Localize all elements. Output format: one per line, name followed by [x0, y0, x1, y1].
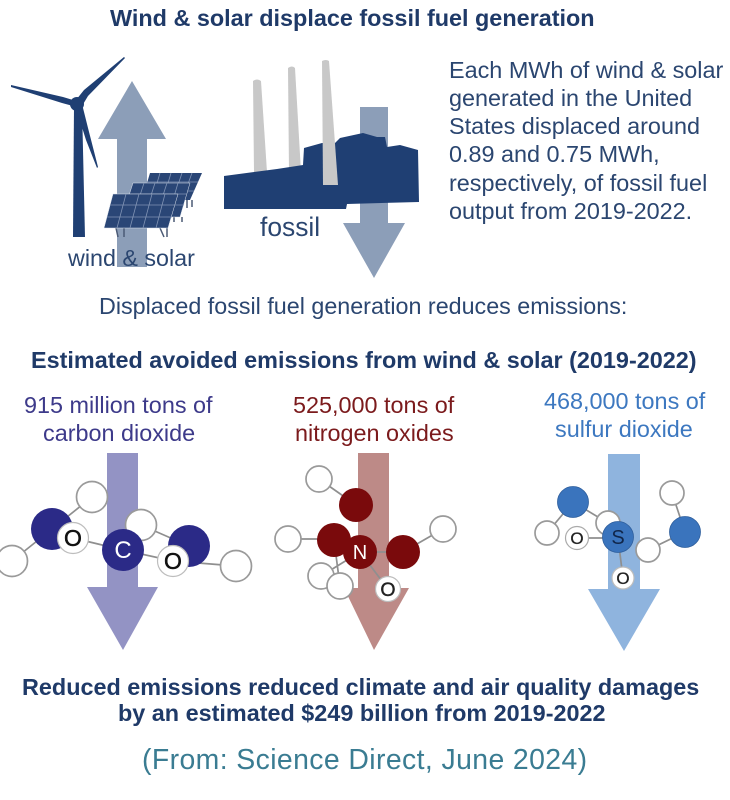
- label: nitrogen oxides tons: [293, 392, 455, 446]
- icon: sulfur dioxide molecule: S: [611, 527, 625, 549]
- icon: sulfur dioxide molecule: O: [616, 569, 630, 588]
- icon: front chimney: [322, 60, 338, 185]
- source line: (From: Science Direct, June 2024): [142, 744, 588, 776]
- label: fossil: fossil: [260, 212, 320, 242]
- arrow: nitrogen oxides decrease: [344, 453, 409, 650]
- panel: sulfur dioxide: [535, 388, 706, 651]
- icon: sulfur dioxide molecule: O: [570, 529, 584, 548]
- conclusion text: by an estimated $249 billion from 2019-2022: [118, 700, 606, 726]
- heading: estimated avoided emissions: Estimated avoided emissions from wind & solar (2019-2022): [31, 347, 697, 373]
- icon: nitrogen oxides molecule: [275, 466, 456, 602]
- text: displacement explanation: [449, 57, 724, 224]
- icon: power plant: [224, 133, 419, 209]
- panel: carbon dioxide: [0, 392, 252, 650]
- text: displacement explanation: 0.89 and 0.75 MWh,: [449, 141, 660, 167]
- label: nitrogen oxides tons: nitrogen oxides: [295, 420, 454, 446]
- icon: nitrogen oxides molecule: N: [353, 542, 367, 564]
- icon: carbon dioxide molecule: [0, 482, 252, 582]
- arrow: wind and solar increase: [98, 81, 166, 267]
- icon: wind turbine: [11, 57, 125, 237]
- panel: wind and solar: [11, 57, 202, 271]
- label: sulfur dioxide tons: sulfur dioxide: [555, 416, 693, 442]
- icon: chimneys: [253, 66, 301, 172]
- label: carbon dioxide tons: carbon dioxide: [43, 420, 195, 446]
- icon: solar panels: [104, 173, 202, 237]
- subheading: displaced generation: Displaced fossil fuel generation reduces emissions:: [99, 293, 627, 319]
- conclusion text: [22, 674, 699, 726]
- text: displacement explanation: output from 2019-2022.: [449, 198, 692, 224]
- label: carbon dioxide tons: 915 million tons of: [24, 392, 213, 418]
- label: nitrogen oxides tons: 525,000 tons of: [293, 392, 455, 418]
- icon: nitrogen oxides molecule: O: [380, 579, 396, 601]
- panel: fossil: [224, 60, 419, 278]
- text: displacement explanation: generated in the United: [449, 85, 692, 111]
- label: carbon dioxide tons: [24, 392, 213, 446]
- arrow: carbon dioxide decrease: [87, 453, 158, 650]
- label: sulfur dioxide tons: 468,000 tons of: [544, 388, 706, 414]
- arrow: sulfur dioxide decrease: [588, 454, 660, 651]
- panel: nitrogen oxides: [275, 392, 456, 650]
- label: sulfur dioxide tons: [544, 388, 706, 442]
- arrow: fossil decrease: [343, 107, 405, 278]
- text: displacement explanation: Each MWh of wind & solar: [449, 57, 724, 83]
- icon: carbon dioxide molecule: O: [64, 525, 82, 551]
- icon: sulfur dioxide molecule: [535, 481, 700, 589]
- conclusion text: Reduced emissions reduced climate and air quality damages: [22, 674, 699, 700]
- text: displacement explanation: States displaced around: [449, 113, 700, 139]
- icon: carbon dioxide molecule: O: [164, 548, 182, 574]
- title: Wind & solar displace fossil fuel generation: [110, 5, 595, 31]
- icon: carbon dioxide molecule: C: [114, 537, 132, 564]
- text: displacement explanation: respectively, of fossil fuel: [449, 170, 707, 196]
- label: wind & solar: wind & solar: [67, 245, 195, 271]
